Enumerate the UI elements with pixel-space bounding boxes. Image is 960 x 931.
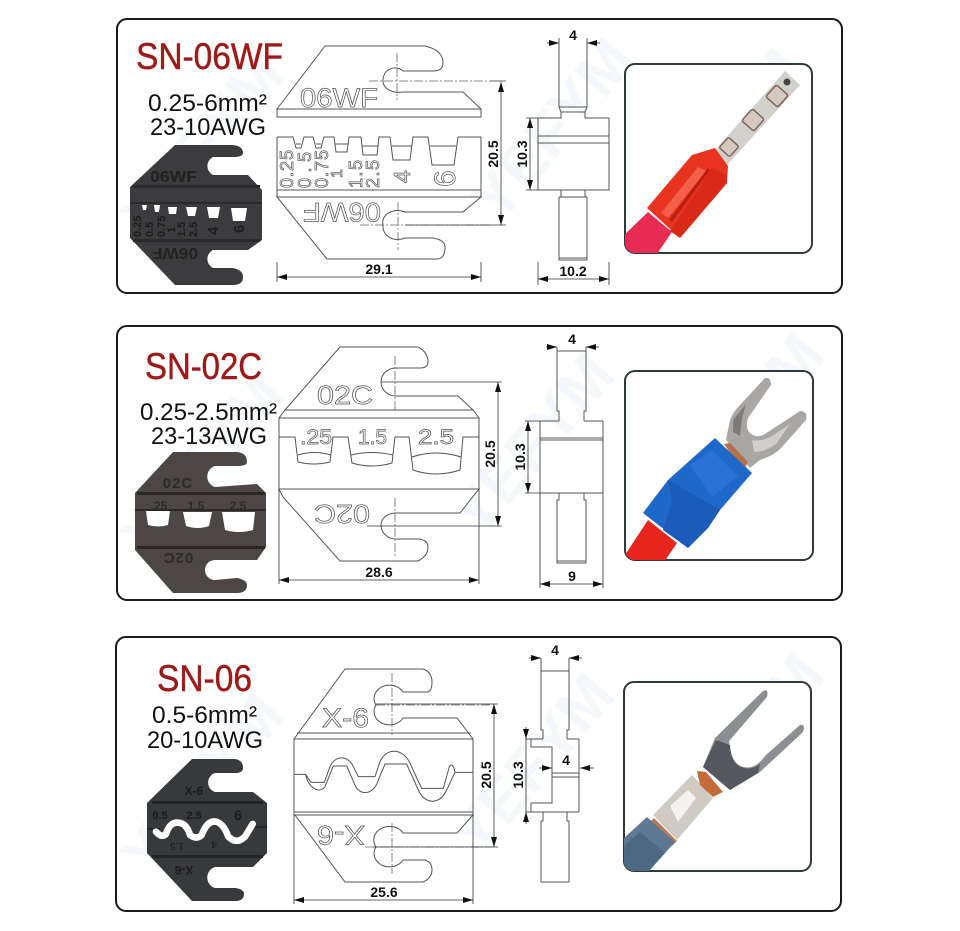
die photo: 0.5 (144, 222, 156, 237)
jaw drawing: 0.75 (312, 150, 332, 188)
panel: SN-06: YEFYM (438, 661, 628, 869)
die photo: 4 (205, 226, 222, 235)
die photo: 02C (163, 475, 193, 492)
jaw drawing: X-6 (317, 820, 365, 850)
die photo: 06WF (150, 169, 197, 186)
wire range text (148, 90, 267, 141)
panel: SN-02C: YEFYM (648, 321, 838, 529)
title: SN-06WF (136, 36, 283, 77)
wire range text: 0.5-6mm² (152, 702, 257, 729)
title: SN-06 (157, 658, 252, 699)
die photo: X-6 (174, 863, 193, 877)
photo: insulated fork terminal (622, 682, 811, 872)
side view drawing: 4 (568, 331, 576, 347)
jaw drawing: 06WF (303, 197, 381, 227)
panel: SN-06 (108, 637, 841, 911)
dimensions: 20.5 (478, 761, 494, 789)
die photo (135, 452, 266, 593)
title: SN-02C (145, 346, 262, 387)
jaw drawing: 2.5 (363, 160, 383, 188)
jaw drawing: 4 (389, 170, 415, 183)
jaw drawing: 0.5 (295, 152, 315, 188)
jaw drawing: 2.5 (418, 426, 454, 449)
wire range text (140, 399, 277, 450)
die photo: 2.5 (186, 810, 202, 822)
die photo (147, 759, 267, 901)
die photo: 1.5 (170, 840, 184, 851)
jaw drawing: 0.25 (277, 150, 297, 188)
dimensions: 29.1 (365, 261, 393, 277)
side view drawing: 4 (551, 642, 559, 658)
wire range text: 20-10AWG (147, 727, 263, 754)
panel: SN-06WF: YEFYM (458, 26, 648, 234)
die photo: 02C (163, 549, 193, 566)
jaw drawing: 1 (329, 169, 346, 178)
die photo: .25 (151, 499, 168, 513)
die photo: 6 (234, 807, 242, 823)
wire range text: 0.25-6mm² (148, 90, 267, 117)
panel: SN-06: YEFYM (648, 641, 838, 849)
jaw drawing: 02C (317, 380, 373, 410)
jaw drawing (294, 669, 492, 882)
dimensions (279, 382, 502, 584)
jaw drawing (277, 46, 490, 259)
side view drawing: 4 (569, 27, 577, 43)
jaw drawing: 1.5 (358, 426, 387, 449)
dimensions (294, 704, 498, 904)
dimensions: 20.5 (485, 140, 501, 168)
panel: SN-06WF: YEFYM (108, 41, 298, 249)
dimensions: 20.5 (482, 440, 498, 468)
die photo: 0.5 (152, 810, 168, 822)
wire range text: 23-10AWG (150, 114, 266, 141)
dimensions: 28.6 (365, 564, 393, 580)
die photo: 4 (211, 838, 217, 850)
die photo: X-6 (185, 784, 204, 798)
die photo: 2.5 (230, 499, 247, 513)
side view drawing: 9 (568, 568, 576, 584)
side view drawing: 10.3 (512, 443, 528, 471)
jaw drawing: 6 (429, 170, 462, 187)
die photo: 0.75 (156, 216, 168, 237)
die photo: 2.5 (188, 222, 200, 237)
jaw drawing: 06WF (300, 83, 378, 113)
panel: SN-02C: YEFYM (438, 341, 628, 549)
wire range text: 0.25-2.5mm² (140, 399, 277, 426)
side view drawing: 10.3 (510, 761, 526, 789)
jaw drawing: .25 (300, 426, 332, 449)
side view drawing: 10.2 (559, 263, 587, 279)
die photo: 1.5 (188, 499, 205, 513)
panel: SN-02C (108, 321, 842, 600)
side view drawing (512, 331, 603, 588)
die photo: 6 (231, 225, 248, 233)
panel: SN-06WF (108, 19, 842, 293)
wire range text: 23-13AWG (151, 423, 267, 450)
side view drawing: 4 (562, 752, 570, 768)
jaw drawing (279, 347, 479, 561)
jaw drawing: 1.5 (346, 160, 366, 188)
photo: red ferrule (622, 64, 812, 254)
side view drawing (514, 27, 609, 285)
die photo: 06WF (152, 244, 198, 261)
jaw drawing: X-6 (322, 703, 369, 733)
die photo (130, 145, 262, 285)
panel: SN-06WF: YEFYM (628, 36, 818, 244)
panel: SN-06: YEFYM (108, 681, 298, 889)
die photo: 1 (166, 227, 178, 233)
photo: blue fork terminal (625, 371, 813, 562)
die photo: 1.5 (176, 222, 188, 237)
die photo: 0.25 (132, 216, 144, 237)
dimensions: 25.6 (370, 884, 398, 900)
jaw drawing: 02C (314, 499, 370, 529)
dimensions (277, 81, 506, 282)
side view drawing: 10.3 (514, 140, 530, 168)
side view drawing (510, 642, 594, 882)
wire range text (147, 702, 263, 754)
panel: SN-02C: YEFYM (108, 361, 298, 569)
